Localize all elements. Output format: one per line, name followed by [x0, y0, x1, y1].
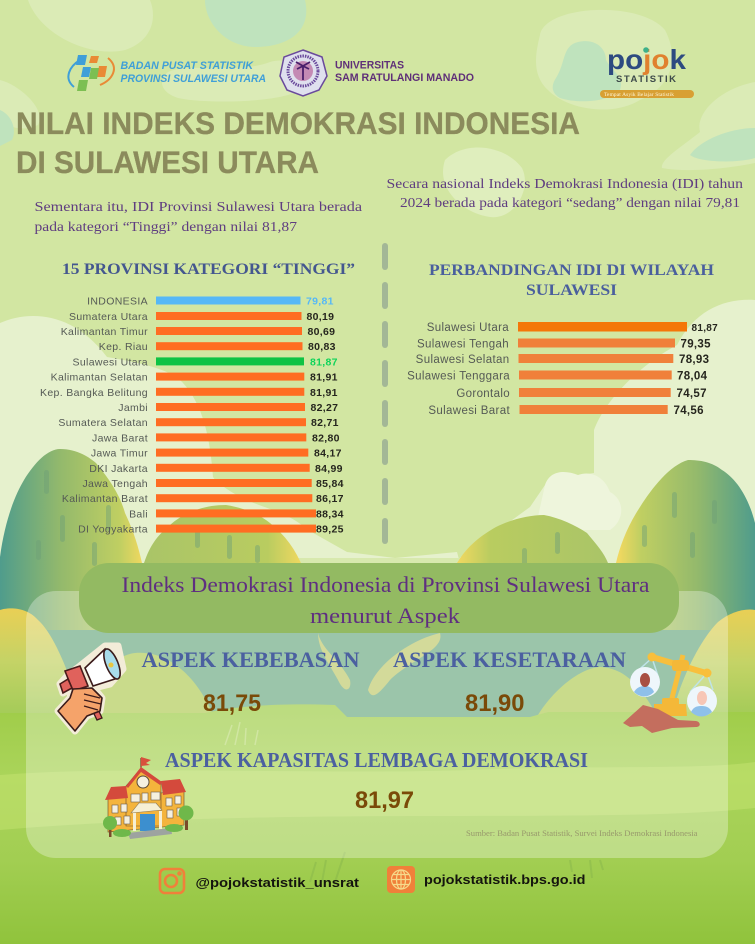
- bar chart: Sulawesi comparison: 78,93: [679, 354, 709, 366]
- title: [16, 105, 580, 180]
- bar chart: Sulawesi comparison: [407, 322, 718, 417]
- heading: aspek kebebasan: ASPEK KEBEBASAN: [142, 647, 360, 672]
- bar chart: 15 provinces high category: Jawa Timur: [91, 448, 148, 460]
- bar chart: 15 provinces high category: 80,83: [308, 341, 336, 353]
- bar chart: 15 provinces high category: Kep. Bangka Belitung: [40, 387, 148, 399]
- icon: megaphone: [58, 646, 124, 731]
- website: pojokstatistik.bps.go.id: [424, 872, 586, 887]
- bar chart: 15 provinces high category: 79,81: [306, 296, 334, 308]
- logo text: university: UNIVERSITAS: [335, 60, 404, 72]
- icon: scales: [623, 652, 717, 733]
- bar chart: 15 provinces high category: Sulawesi Utara: [72, 356, 148, 368]
- bar chart: 15 provinces high category: 82,71: [311, 417, 339, 429]
- social handle: @pojokstatistik_unsrat: [196, 875, 360, 890]
- pill heading: aspects: menurut Aspek: [310, 603, 460, 628]
- bar chart: Sulawesi comparison: Sulawesi Barat: [428, 405, 510, 417]
- lower scene behind panel: [70, 653, 215, 720]
- logo: Pojok Statistik: Tempat Asyik Belajar Statistik: [604, 92, 674, 98]
- bar chart: Sulawesi comparison: 81,87: [692, 323, 718, 334]
- bar chart: 15 provinces high category: Jawa Barat: [92, 432, 148, 444]
- heading: aspek kapasitas lembaga demokrasi: ASPEK KAPASITAS LEMBAGA DEMOKRASI: [165, 748, 588, 772]
- translucent panel: aspects: [26, 591, 728, 858]
- title: DI SULAWESI UTARA: [16, 144, 319, 180]
- bar chart: 15 provinces high category: 81,91: [310, 372, 338, 384]
- logo: Pojok Statistik: STATISTIK: [616, 74, 676, 85]
- bar chart: 15 provinces high category: 89,25: [316, 524, 344, 536]
- bar chart: 15 provinces high category: 82,27: [310, 402, 338, 414]
- bar chart: Sulawesi comparison: Sulawesi Selatan: [416, 354, 510, 366]
- bar chart: 15 provinces high category: Jawa Tengah: [82, 478, 148, 490]
- bar chart: Sulawesi comparison: Sulawesi Tengah: [417, 338, 509, 350]
- pill heading: aspects: [79, 563, 679, 633]
- bar chart: 15 provinces high category: 84,17: [314, 448, 342, 460]
- logo text: university: [335, 60, 474, 84]
- bar chart: 15 provinces high category: 84,99: [315, 463, 343, 475]
- bar chart: 15 provinces high category: [40, 296, 344, 536]
- bar chart: 15 provinces high category: Kalimantan Barat: [62, 493, 148, 505]
- logo text: university: SAM RATULANGI MANADO: [335, 72, 474, 84]
- hills: [0, 449, 150, 630]
- teal band behind lower panel: [0, 566, 755, 720]
- bar chart: 15 provinces high category: Sumatera Utara: [69, 311, 148, 323]
- pill heading: aspects: Indeks Demokrasi Indonesia di Provinsi Sulawesi Utara: [122, 572, 650, 597]
- value: kapasitas: 81,97: [355, 787, 414, 814]
- logo: Pojok Statistik: [600, 44, 694, 98]
- bar chart: Sulawesi comparison: Sulawesi Tenggara: [407, 370, 510, 382]
- text block: national summary: [386, 176, 743, 210]
- heading: Sulawesi comparison chart: SULAWESI: [526, 282, 617, 299]
- bar chart: 15 provinces high category: 81,91: [310, 387, 338, 399]
- logo: Universitas Sam Ratulangi: [280, 50, 474, 96]
- logo text: BPS: PROVINSI SULAWESI UTARA: [120, 73, 266, 85]
- bar chart: Sulawesi comparison: 79,35: [680, 338, 711, 350]
- bar chart: 15 provinces high category: Jambi: [118, 402, 148, 414]
- title: NILAI INDEKS DEMOKRASI INDONESIA: [16, 105, 580, 141]
- heading: Sulawesi comparison chart: PERBANDINGAN IDI DI WILAYAH: [429, 262, 714, 279]
- heading: 15 provinces chart: 15 PROVINSI KATEGORI “TINGGI”: [62, 261, 355, 278]
- bar chart: Sulawesi comparison: 74,57: [676, 388, 707, 400]
- logo: Pojok Statistik: pojok: [607, 44, 686, 75]
- soft light clouds behind the charts: [0, 316, 300, 600]
- bar chart: Sulawesi comparison: Gorontalo: [456, 388, 510, 400]
- bar chart: Sulawesi comparison: 74,56: [674, 405, 704, 417]
- logo text: BPS: [120, 60, 266, 85]
- bar chart: 15 provinces high category: Kalimantan Timur: [61, 326, 148, 338]
- logo text: BPS: BADAN PUSAT STATISTIK: [120, 60, 254, 72]
- text block: provincial summary: Sementara itu, IDI Provinsi Sulawesi Utara berada: [34, 199, 362, 214]
- bar chart: 15 provinces high category: 82,80: [312, 432, 340, 444]
- bar chart: 15 provinces high category: Sumatera Selatan: [58, 417, 148, 429]
- icon: website globe: [387, 866, 415, 893]
- bar chart: 15 provinces high category: DI Yogyakarta: [78, 524, 148, 536]
- bar chart: 15 provinces high category: Bali: [129, 508, 148, 520]
- bar chart: 15 provinces high category: 81,87: [310, 356, 338, 368]
- logo: BPS: [68, 55, 266, 91]
- icon: instagram: [160, 869, 184, 893]
- heading: aspek kesetaraan: ASPEK KESETARAAN: [393, 647, 626, 672]
- text block: national summary: 2024 berada pada kategori “sedang” dengan nilai 79,81: [400, 195, 740, 210]
- bar chart: Sulawesi comparison: 78,04: [677, 370, 708, 382]
- bar chart: 15 provinces high category: 86,17: [316, 493, 344, 505]
- bar chart: Sulawesi comparison: Sulawesi Utara: [427, 322, 509, 334]
- bar chart: 15 provinces high category: Kep. Riau: [99, 341, 148, 353]
- bar chart: 15 provinces high category: 88,34: [316, 508, 344, 520]
- bar chart: 15 provinces high category: INDONESIA: [87, 296, 148, 308]
- text block: provincial summary: pada kategori “Tinggi” dengan nilai 81,87: [34, 219, 297, 234]
- value: kebebasan: 81,75: [203, 690, 261, 717]
- bar chart: 15 provinces high category: 80,69: [308, 326, 335, 338]
- icon: school: [103, 757, 194, 839]
- divider: [382, 243, 388, 544]
- bar chart: 15 provinces high category: DKI Jakarta: [89, 463, 148, 475]
- bar chart: 15 provinces high category: 85,84: [316, 478, 344, 490]
- bar chart: 15 provinces high category: Kalimantan Selatan: [51, 372, 148, 384]
- value: kesetaraan: 81,90: [465, 690, 524, 717]
- source note: Sumber: Badan Pusat Statistik, Survei Indeks Demokrasi Indonesia: [466, 829, 698, 838]
- heading: Sulawesi comparison chart: [429, 262, 714, 299]
- bar chart: 15 provinces high category: 80,19: [306, 311, 334, 323]
- text block: provincial summary: [34, 199, 362, 234]
- text block: national summary: Secara nasional Indeks Demokrasi Indonesia (IDI) tahun: [386, 176, 743, 191]
